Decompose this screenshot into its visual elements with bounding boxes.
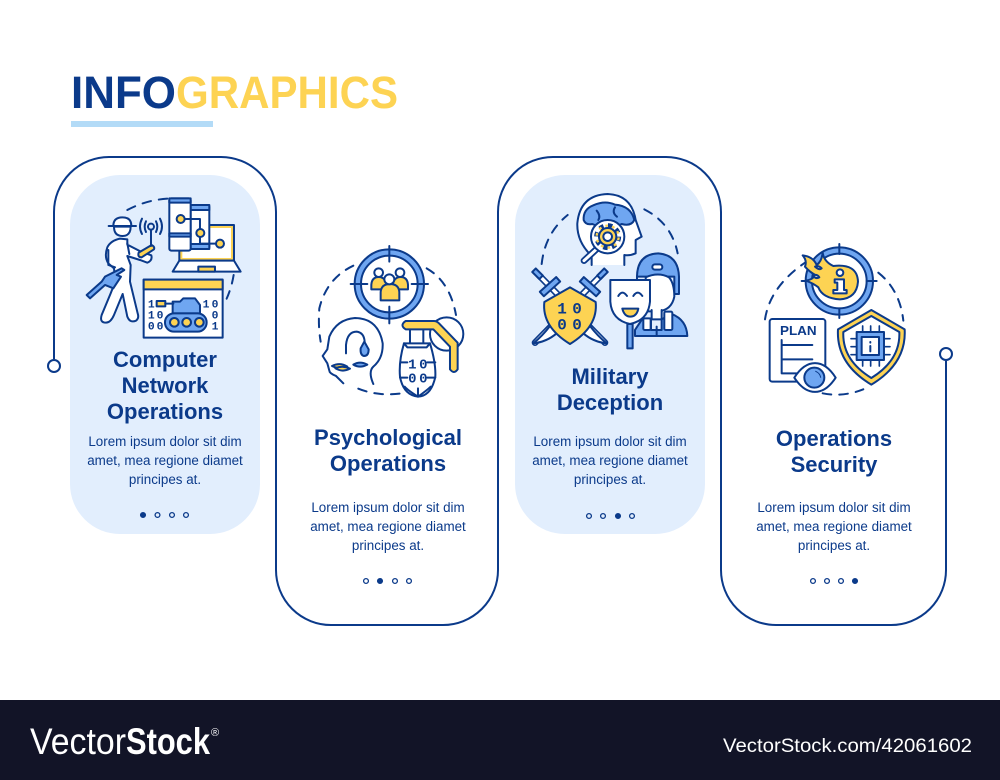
shield (838, 310, 905, 385)
icon: target, head and grenade: 0 (419, 372, 428, 388)
text block: amet, mea regione diamet (87, 453, 243, 468)
phones (191, 205, 209, 249)
icon: brain, shield and mask: 0 (572, 300, 582, 318)
window with tank (144, 280, 223, 338)
swords (535, 275, 605, 343)
icon: soldier with computers and tank: 0 (148, 321, 155, 333)
icon: soldier with computers and tank: 1 (203, 299, 210, 311)
icon: burning info, plan and shield (765, 244, 905, 395)
heading (314, 425, 462, 476)
step dots (587, 514, 634, 518)
title: GRAPHICS (176, 67, 398, 118)
step dots (811, 579, 857, 583)
panel backgrounds (70, 175, 705, 534)
text block: principes at. (798, 538, 870, 553)
heading: Psychological (314, 425, 462, 450)
icon: soldier with computers and tank: 0 (157, 310, 164, 322)
profile head (577, 194, 642, 265)
icon: brain, shield and mask: 0 (572, 316, 582, 334)
icon: soldier with computers and tank: 0 (212, 310, 219, 322)
footer logo (30, 721, 219, 762)
icon: target, head and grenade: 0 (408, 372, 417, 388)
text block: Lorem ipsum dolor sit dim (533, 434, 687, 449)
panel: military deception (532, 194, 688, 518)
footer logo: Stock (126, 721, 210, 762)
text block: principes at. (352, 538, 424, 553)
panel: computer network operations (87, 198, 243, 517)
heading: Operations (776, 426, 892, 451)
heading: Military (571, 364, 649, 389)
heading: Operations (330, 451, 446, 476)
text block: amet, mea regione diamet (310, 519, 466, 534)
icon: brain, shield and mask: 0 (557, 316, 567, 334)
heading (557, 364, 663, 415)
footer logo: ® (211, 727, 219, 739)
text block: amet, mea regione diamet (532, 453, 688, 468)
text block: Lorem ipsum dolor sit dim (757, 500, 911, 515)
text block (532, 434, 688, 487)
grenade (430, 317, 463, 351)
text block (310, 500, 466, 553)
title: INFO (71, 67, 176, 118)
text block: Lorem ipsum dolor sit dim (88, 434, 242, 449)
gear (596, 225, 619, 248)
title underline (71, 121, 213, 127)
heading: Network (122, 373, 209, 398)
icon: target, head and grenade (319, 246, 463, 397)
step dots (364, 579, 411, 583)
heading: Operations (107, 399, 223, 424)
heading: Security (791, 452, 878, 477)
text block: amet, mea regione diamet (756, 519, 912, 534)
icon: soldier with computers and tank: 1 (148, 310, 155, 322)
heading (776, 426, 892, 477)
text block: principes at. (129, 472, 201, 487)
title (71, 67, 398, 118)
footer bar (0, 700, 1000, 780)
icon: soldier with computers and tank: 1 (148, 299, 155, 311)
icon: soldier with computers and tank: 1 (212, 321, 219, 333)
soldier (637, 253, 679, 294)
text block (87, 434, 243, 487)
icon: burning info, plan and shield: PLAN (780, 323, 817, 338)
icon: target, head and grenade: 1 (408, 357, 417, 373)
panel: psychological operations (310, 246, 466, 583)
heading (107, 347, 223, 424)
head (323, 318, 383, 384)
icon: brain, shield and mask (532, 194, 687, 348)
icon: target, head and grenade: 0 (419, 357, 428, 373)
plan (770, 319, 825, 382)
icon: soldier with computers and tank: 0 (212, 299, 219, 311)
step dots (141, 513, 188, 517)
icon: soldier with computers and tank: 0 (157, 321, 164, 333)
text block: Lorem ipsum dolor sit dim (311, 500, 465, 515)
panel: operations security (756, 244, 912, 583)
text block (756, 500, 912, 553)
footer logo: Vector (30, 721, 126, 762)
text block: principes at. (574, 472, 646, 487)
heading: Deception (557, 390, 663, 415)
connecting timeline outline (48, 157, 952, 625)
footer url: VectorStock.com/42061602 (723, 736, 972, 757)
icon: soldier with computers and tank (87, 198, 241, 338)
icon: brain, shield and mask: 1 (557, 300, 567, 318)
heading: Computer (113, 347, 217, 372)
monitor (179, 225, 234, 261)
mask (610, 280, 650, 324)
soldier (101, 239, 152, 323)
